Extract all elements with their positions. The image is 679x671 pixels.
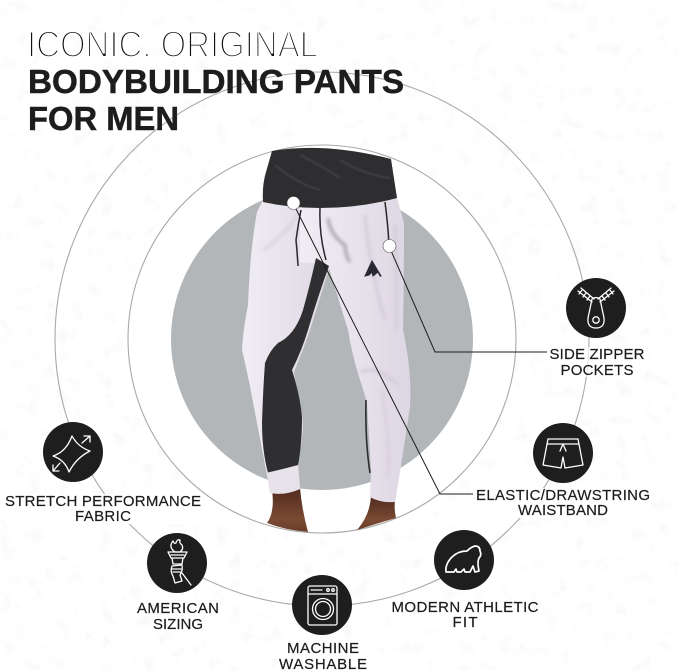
- icon: stretch fabric: [43, 422, 103, 482]
- left cuff: [267, 466, 300, 494]
- title line 2: BODYBUILDING PANTS: [28, 63, 404, 100]
- label: waistband: ELASTIC/DRAWSTRING: [476, 487, 650, 504]
- pants photo: [242, 148, 410, 532]
- label: modern athletic fit: MODERN ATHLETIC: [392, 599, 539, 616]
- logo mark: [365, 261, 381, 276]
- waistband folds: [275, 155, 390, 190]
- icon: shorts: [533, 423, 593, 483]
- label: machine washable: [279, 640, 368, 671]
- label: stretch fabric: [5, 493, 202, 525]
- label: stretch fabric: FABRIC: [75, 508, 131, 525]
- outer ring: [55, 72, 589, 606]
- leader line: zipper pockets: [389, 246, 547, 352]
- title line 3: FOR MEN: [28, 100, 179, 137]
- label: waistband: WAISTBAND: [518, 502, 608, 519]
- inner ring: [128, 145, 516, 533]
- label: side zipper: POCKETS: [560, 362, 634, 379]
- label: waistband: [476, 487, 651, 519]
- right inner seam: [366, 400, 370, 473]
- icon: washing machine: [292, 575, 352, 635]
- waistband: [263, 148, 397, 208]
- label: stretch fabric: STRETCH PERFORMANCE: [5, 493, 201, 510]
- leader line: waistband: [293, 203, 473, 494]
- left foot: [267, 488, 308, 532]
- label: american sizing: AMERICAN: [137, 600, 219, 617]
- icon: side zipper: [566, 278, 626, 338]
- title line 1: ICONIC, ORIGINAL: [27, 24, 318, 65]
- fabric folds: [263, 215, 398, 478]
- right foot: [357, 496, 396, 530]
- left leg: [242, 200, 330, 494]
- grey disc: [171, 188, 473, 490]
- icon: gorilla: [434, 530, 494, 590]
- label: machine washable: MACHINE: [287, 640, 359, 657]
- label: side zipper: SIDE ZIPPER: [550, 346, 645, 363]
- right leg: [300, 198, 410, 502]
- label: modern athletic fit: [392, 599, 540, 631]
- cuff seam: [268, 466, 298, 473]
- label: american sizing: SIZING: [153, 616, 203, 633]
- marker: waistband: [287, 196, 300, 210]
- dark inner panel: [262, 258, 329, 473]
- marker: zipper pocket: [383, 240, 396, 252]
- title: [27, 24, 404, 137]
- label: side zipper: [549, 346, 645, 379]
- icon: torch: [147, 533, 207, 593]
- label: american sizing: [137, 600, 219, 633]
- label: modern athletic fit: FIT: [452, 614, 478, 631]
- drawstrings: [296, 202, 389, 266]
